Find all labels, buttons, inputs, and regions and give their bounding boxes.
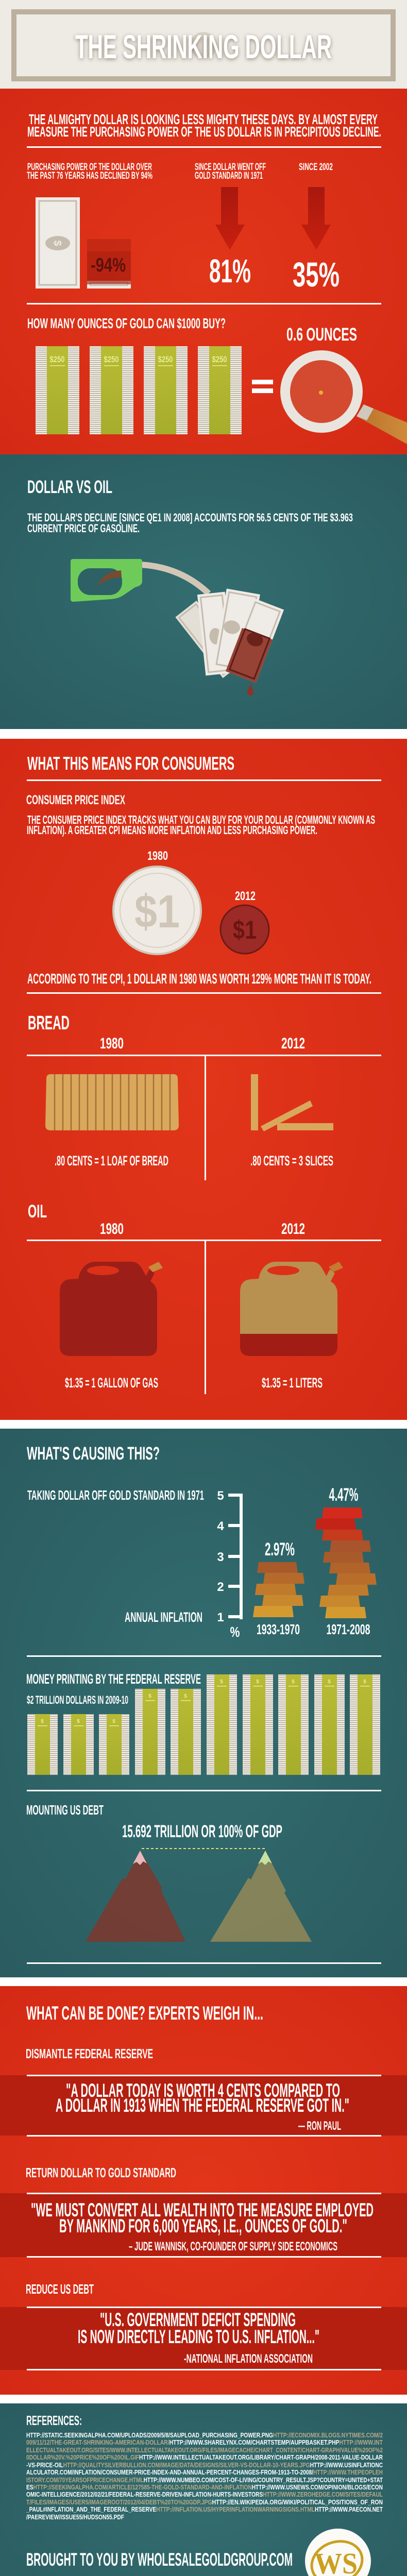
dashed comparison line xyxy=(142,1848,266,1849)
panel: what can be done xyxy=(0,1986,407,2395)
stat label: purchasing power: THE PAST 76 YEARS HAS DECLINED BY 94% xyxy=(27,171,152,181)
bar stack 1933-1970: 2.97% xyxy=(265,1539,295,1560)
subheading: money printing: MONEY PRINTING BY THE FEDERAL RESERVE xyxy=(26,1671,201,1687)
equals sign xyxy=(252,380,273,393)
chart: money stacks: $ xyxy=(292,1679,295,1685)
subheading: dismantle fed: DISMANTLE FEDERAL RESERVE xyxy=(26,2046,153,2061)
money stacks $250 x4: $250 xyxy=(212,354,227,364)
stat label: since 2002: SINCE 2002 xyxy=(299,162,333,173)
bread labels: .80 CENTS = 1 LOAF OF BREAD xyxy=(55,1153,168,1168)
subheading: gold standard: TAKING DOLLAR OFF GOLD STANDARD IN 1971 xyxy=(27,1487,204,1503)
coin 2012 xyxy=(221,889,269,954)
heading: consumers: WHAT THIS MEANS FOR CONSUMERS xyxy=(27,753,234,774)
stat label: purchasing power: PURCHASING POWER OF THE DOLLAR OVER xyxy=(27,162,152,173)
chart axis xyxy=(125,1489,243,1640)
coin 1980: $1 xyxy=(134,886,180,938)
chart axis: 2 xyxy=(217,1580,224,1594)
icon: magnifying glass xyxy=(280,350,407,444)
bar stack 1933-1970 xyxy=(253,1539,304,1637)
panel: references and credits xyxy=(0,2403,407,2576)
icon: dollar bill full xyxy=(36,197,80,289)
chart axis: % xyxy=(230,1624,240,1640)
title frame xyxy=(14,12,393,79)
arrow: 81%: 81% xyxy=(209,252,251,290)
quote: national inflation association: -NATIONAL INFLATION ASSOCIATION xyxy=(184,2352,313,2366)
oil labels: $1.35 = 1 GALLON OF GAS xyxy=(65,1375,158,1391)
references list: ALCULATOR.COM/INFLATION/CONSUMER-PRICE-INDEX-AND-ANNUAL-PERCENT-CHANGES-FROM-1913-TO-2008/HTTP://WWW.THEPEOPLEH xyxy=(26,2468,383,2476)
bread years xyxy=(100,1035,305,1052)
chart: money stacks: $ xyxy=(112,1719,115,1724)
chart axis: 5 xyxy=(217,1489,224,1503)
subheading: bread: BREAD xyxy=(28,1012,70,1034)
arrow: 35% xyxy=(293,187,340,294)
icon: mountain gdp xyxy=(210,1851,312,1942)
subheading: CPI: CONSUMER PRICE INDEX xyxy=(26,793,125,807)
bar stack 1933-1970: 1933-1970 xyxy=(257,1621,300,1637)
bar stack 1971-2008: 4.47% xyxy=(329,1485,359,1505)
oil years: 1980 xyxy=(100,1221,124,1238)
answer: 0.6 ounces: 0.6 OUNCES xyxy=(286,325,357,345)
subheading: money printing: $2 TRILLION DOLLARS IN 2009-10 xyxy=(27,1693,128,1706)
chart axis: 3 xyxy=(217,1550,224,1564)
oil text: CURRENT PRICE OF GASOLINE. xyxy=(27,522,140,535)
icon: bread loaf xyxy=(45,1074,179,1130)
oil text xyxy=(27,511,353,535)
subheading: reduce debt: REDUCE US DEBT xyxy=(26,2281,94,2297)
panel: what this means for consumers xyxy=(0,739,407,1420)
icon: dollar bill full: $ xyxy=(52,240,63,246)
intro text xyxy=(27,111,381,140)
bread years: 1980 xyxy=(100,1035,124,1052)
chart: money stacks: $ xyxy=(77,1719,80,1724)
icon: three bread slices xyxy=(251,1074,333,1131)
arrow: 35%: 35% xyxy=(293,256,340,294)
references list: HTTP://STATIC.SEEKINGALPHA.COM/UPLOADS/2009/5/8/SAUPLOAD_PURCHASING_POWER.PNGHTTP://ECONOMIX.BLOGS.NYTIMES.COM/2 xyxy=(26,2431,383,2439)
quote: ron paul xyxy=(0,2075,407,2137)
coin 1980: 1980 xyxy=(147,849,168,863)
subheading: money printing xyxy=(26,1671,201,1706)
chart: money stacks xyxy=(27,1674,380,1775)
chart axis: 4 xyxy=(217,1519,224,1533)
icon: fanned dollar bills dripping oil xyxy=(175,588,284,696)
header band xyxy=(0,0,407,89)
chart: annual inflation gold bars xyxy=(125,1485,377,1640)
chart: money stacks: $ xyxy=(220,1679,223,1685)
bread labels: .80 CENTS = 3 SLICES xyxy=(250,1153,333,1168)
oil years xyxy=(100,1221,305,1238)
chart axis: 1 xyxy=(217,1611,224,1624)
chart: money stacks: $ xyxy=(184,1693,187,1699)
heading: causes: WHAT'S CAUSING THIS? xyxy=(27,1444,160,1464)
subheading: mounting debt: MOUNTING US DEBT xyxy=(26,1802,104,1818)
subheading: oil: OIL xyxy=(28,1201,47,1222)
coin 2012: $1 xyxy=(233,916,257,944)
panel: intro red section xyxy=(0,89,407,454)
gold question heading: HOW MANY OUNCES OF GOLD CAN $1000 BUY? xyxy=(27,315,226,331)
stat label: since 1971 xyxy=(195,162,266,181)
oil labels xyxy=(65,1375,323,1391)
references list: /PAEREVIEW/ISSUE55/HUDSON55.PDF xyxy=(26,2513,124,2521)
chart: money stacks: $ xyxy=(256,1679,259,1685)
chart: money stacks: $ xyxy=(328,1679,331,1685)
oil years: 2012 xyxy=(281,1221,305,1238)
money stacks $250 x4: $250 xyxy=(158,354,173,364)
debt figure: 15.692 TRILLION OR 100% OF GDP xyxy=(122,1822,282,1841)
panel: dollar vs oil xyxy=(0,454,407,729)
references list: -VS-PRICE-OILHTTP://QUALITYSILVERBULLION.COM/IMAGE/DATA/DESIGNS/SILVER-VS-DOLLAR-10-YEARS.JPGHTTP://WWW.USINFLATIONC xyxy=(26,2461,383,2469)
coin 1980 xyxy=(113,849,201,954)
chart: money stacks: $ xyxy=(363,1679,366,1685)
stat label: since 1971: SINCE DOLLAR WENT OFF xyxy=(195,162,266,173)
stat label: since 1971: GOLD STANDARD IN 1971 xyxy=(195,171,263,181)
bread years: 2012 xyxy=(281,1035,305,1052)
quote: jude wannisk xyxy=(0,2193,407,2258)
icon: nearly empty jerry can 2012 xyxy=(240,1262,343,1356)
oil labels: $1.35 = 1 LITERS xyxy=(262,1375,323,1391)
icon: shrunken bill with -94% xyxy=(87,239,131,289)
money stacks $250 x4 xyxy=(36,346,242,434)
heading: dollar vs oil: DOLLAR VS OIL xyxy=(27,477,112,497)
bar stack 1971-2008 xyxy=(315,1485,377,1637)
stat label: purchasing power xyxy=(27,162,152,181)
CPI text xyxy=(27,813,375,837)
money stacks $250 x4: $250 xyxy=(49,354,65,364)
money stacks $250 x4: $250 xyxy=(104,354,118,364)
references list: _PAUL#INFLATION_AND_THE_FEDERAL_RESERVEHTTP://INFLATION.US/HYPERINFLATIONWARNINGSIGNS.HTMLHTTP://WWW.PAECON.NET xyxy=(26,2505,383,2513)
icon: gas pump nozzle and hose xyxy=(71,559,209,602)
icon: mountain debt xyxy=(86,1851,185,1942)
bar stack 1971-2008: 1971-2008 xyxy=(327,1621,370,1637)
references list xyxy=(26,2431,383,2521)
chart axis: ANNUAL INFLATION xyxy=(125,1609,202,1625)
icon: shrunken bill with -94%: -94% xyxy=(91,255,126,276)
chart: money stacks: $ xyxy=(41,1719,44,1724)
references list: OMIC-INTELLIGENCE/2012/02/21/FEDERAL-RESERVE-DRIVEN-INFLATION-HURTS-INVESTORSHTTP://WWW.ZEROHEDGE.COM/SITES/DEFAUL xyxy=(26,2490,383,2498)
panel: what's causing this xyxy=(0,1429,407,1977)
references list: 009/11/12/THE-GREAT-SHRINKING-AMERICAN-DOLLAR/HTTP://WWW.SHARELYNX.COM/CHARTSTEMP/AUPPBASKET.PHPHTTP://WWW.INT xyxy=(26,2438,383,2446)
heading: references: REFERENCES: xyxy=(26,2413,82,2428)
coin 2012: 2012 xyxy=(235,889,256,903)
icon: full jerry can 1980 xyxy=(60,1262,163,1356)
subheading: gold standard: RETURN DOLLAR TO GOLD STANDARD xyxy=(26,2165,176,2180)
icon: WS logo xyxy=(305,2529,371,2576)
quote: national inflation association xyxy=(0,2307,407,2370)
quote: ron paul: — RON PAUL xyxy=(298,2119,341,2133)
chart: money stacks: $ xyxy=(148,1693,151,1699)
arrow: 81% xyxy=(209,187,251,290)
